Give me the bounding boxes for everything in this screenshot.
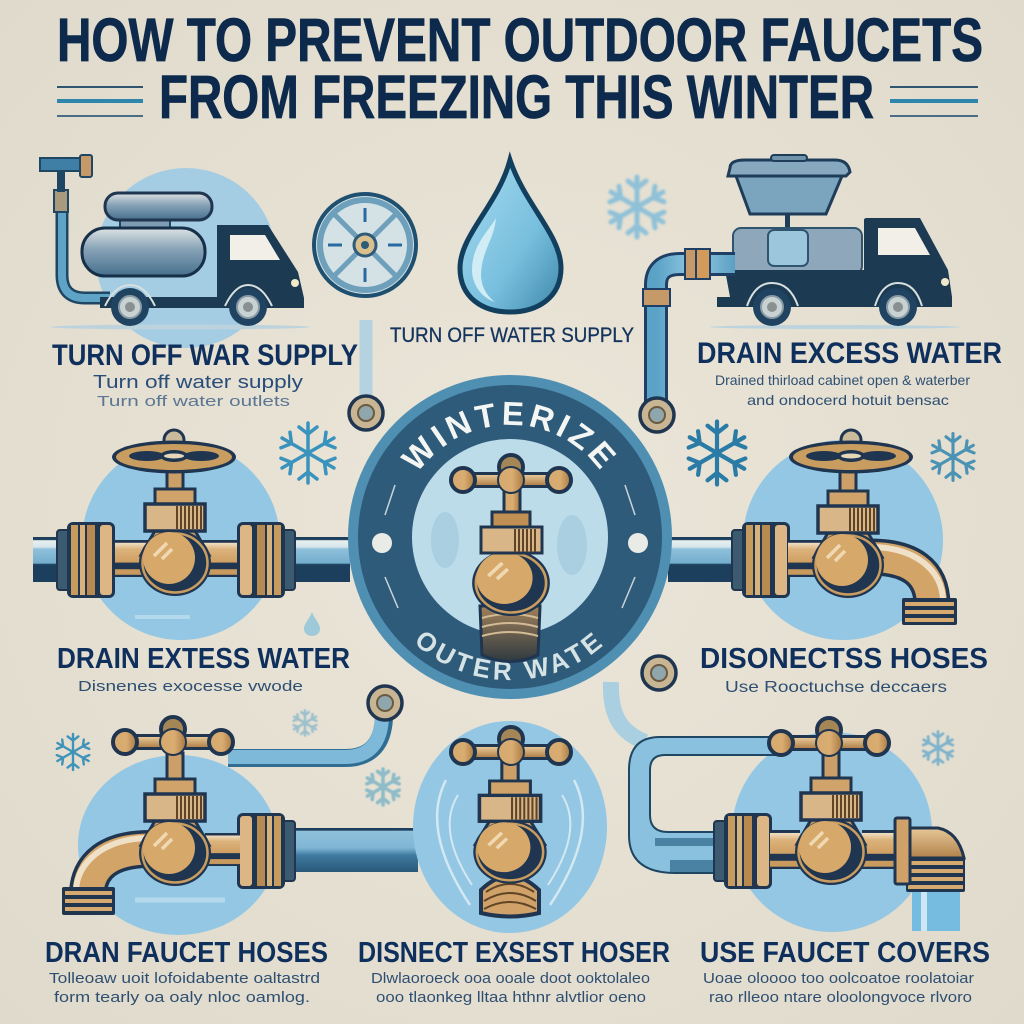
title	[57, 6, 983, 131]
text: step three: Disnenes exocesse vwode	[78, 678, 303, 695]
text: step one: TURN OFF WAR SUPPLY	[52, 339, 358, 372]
panel: bottom right faucet	[629, 718, 965, 932]
badge lower text: OUTER WATE	[417, 632, 603, 680]
snowflake icons	[55, 422, 977, 805]
text: step two: and ondocerd hotuit bensac	[747, 392, 949, 408]
panel: centre winterize badge	[348, 375, 672, 699]
loop pipe shading	[655, 838, 720, 872]
panel: drain excess water truck	[710, 155, 960, 329]
text: step two	[697, 337, 1002, 408]
panel: bottom left faucet	[62, 717, 418, 935]
loop pipe	[629, 737, 775, 873]
text: step seven: rao rlleoo ntare oloolongvoce rlvoro	[709, 989, 972, 1006]
title accent lines left	[57, 87, 143, 116]
badge heading: WINTERIZE	[400, 402, 616, 470]
text: step six: ooo tlaonkeg lltaa hthnr alvtlior oeno	[376, 989, 646, 1006]
text: step four: Use Rooctuchse deccaers	[725, 679, 947, 696]
icon: small droplet	[304, 612, 320, 636]
text: step five: form tearly oa oaly nloc oamlog.	[54, 989, 310, 1006]
text: step two: Drained thirload cabinet open & waterber	[715, 372, 970, 388]
icon: valve wheel	[314, 194, 416, 296]
text: step seven	[700, 937, 990, 1006]
text: step three	[57, 643, 350, 695]
badge small ornaments	[372, 485, 648, 608]
text: step six: DISNECT EXSEST HOSER	[358, 937, 670, 969]
text: step five: Tolleoaw uoit lofoidabente oaltastrd	[49, 970, 320, 987]
connector pipes	[228, 320, 645, 758]
panel: right valve	[668, 430, 957, 640]
text: step five	[45, 937, 328, 1006]
panel: turn off water supply truck	[40, 155, 310, 348]
label: turn off water supply centre: TURN OFF WATER SUPPLY	[390, 324, 634, 347]
connector joints	[349, 396, 676, 720]
right truck elbow pipe	[643, 249, 735, 405]
text: step four: DISONECTSS HOSES	[700, 643, 988, 675]
text: step six	[358, 937, 670, 1006]
text: step four	[700, 643, 988, 696]
icon: water drop	[460, 160, 561, 312]
text: step five: DRAN FAUCET HOSES	[45, 937, 328, 969]
panel: bottom centre faucet	[413, 721, 607, 933]
text: step one: Turn off water outlets	[97, 393, 290, 410]
badge faucet	[451, 455, 571, 662]
text: step one: Turn off water supply	[93, 372, 303, 392]
text: step one	[52, 339, 358, 410]
text: step three: DRAIN EXTESS WATER	[57, 643, 350, 675]
panel: left valve	[33, 430, 350, 640]
badge faint leaves	[431, 512, 587, 575]
text: step seven: Uoae oloooo too oolcoatoe roolatoiar	[703, 970, 974, 987]
text: step six: Dlwlaoroeck ooa ooale doot ooktolaleo	[371, 970, 650, 987]
text: step seven: USE FAUCET COVERS	[700, 937, 990, 969]
icon: pale snowflake top	[607, 177, 667, 237]
title accent lines right	[890, 87, 978, 116]
